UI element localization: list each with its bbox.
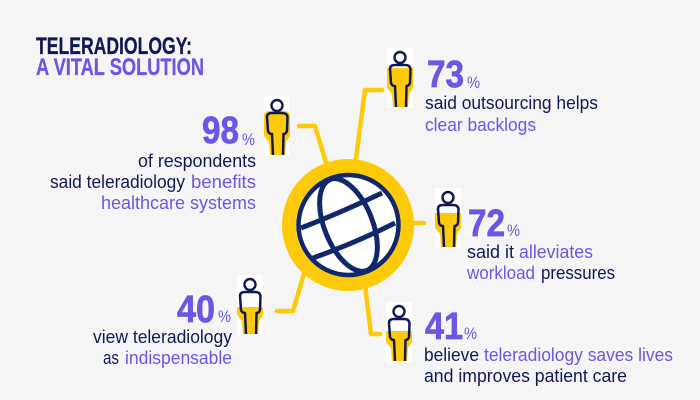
stat: 40%: indispensable	[125, 348, 232, 368]
stat: 72%: 72	[468, 203, 505, 245]
title: A VITAL SOLUTION	[36, 54, 204, 81]
stat: 98%: said teleradiology	[50, 172, 185, 192]
stat: 98%: benefits	[191, 172, 256, 192]
stat: 41%: 41	[425, 306, 463, 348]
stat: 40%: %	[218, 307, 231, 326]
stat: 40%: view teleradiology	[93, 327, 232, 347]
person icon: 40%	[237, 275, 263, 335]
connector: 98% to globe	[299, 126, 327, 166]
stat: 98%	[50, 110, 256, 213]
stat: 98%: 98	[202, 110, 239, 152]
stat: 73%: said outsourcing helps	[425, 93, 598, 113]
stat: 98%: of respondents	[138, 151, 256, 171]
stat: 72%: said it	[467, 242, 514, 262]
person icon: 98%	[264, 96, 290, 156]
stat: 41%	[424, 306, 673, 386]
connector: 73% to globe	[355, 90, 382, 166]
stat: 72%: alleviates	[519, 242, 593, 262]
stat: 98%: %	[242, 130, 255, 149]
stat: 73%: clear backlogs	[425, 115, 536, 135]
stat: 41%: %	[464, 324, 477, 343]
person icon: 73%	[387, 48, 413, 108]
globe icon	[289, 166, 407, 284]
connector: 40% to globe	[277, 270, 305, 311]
stat: 98%: healthcare systems	[101, 193, 256, 213]
person icon: 72%	[435, 188, 461, 248]
stat: 73%: %	[467, 73, 480, 92]
title: TELERADIOLOGY:	[36, 33, 192, 60]
stat: 40%: as	[103, 348, 119, 368]
stat: 72%: pressures	[541, 263, 615, 283]
connector: 41% to globe	[365, 285, 380, 334]
person icon: 41%	[386, 302, 412, 362]
stat: 72%	[466, 203, 615, 283]
stat: 72%: %	[507, 221, 520, 240]
stat: 72%: workload	[466, 263, 535, 283]
stat: 40%	[93, 289, 232, 368]
stat: 41%: believe	[424, 345, 479, 365]
stat: 73%: 73	[427, 54, 464, 96]
stat: 73%	[425, 54, 598, 135]
stat: 41%: and improves patient care	[424, 366, 627, 386]
title	[36, 33, 204, 81]
stat: 41%: teleradiology saves lives	[484, 345, 673, 365]
connector: 72% to globe	[410, 221, 424, 225]
stat: 40%: 40	[177, 289, 215, 331]
